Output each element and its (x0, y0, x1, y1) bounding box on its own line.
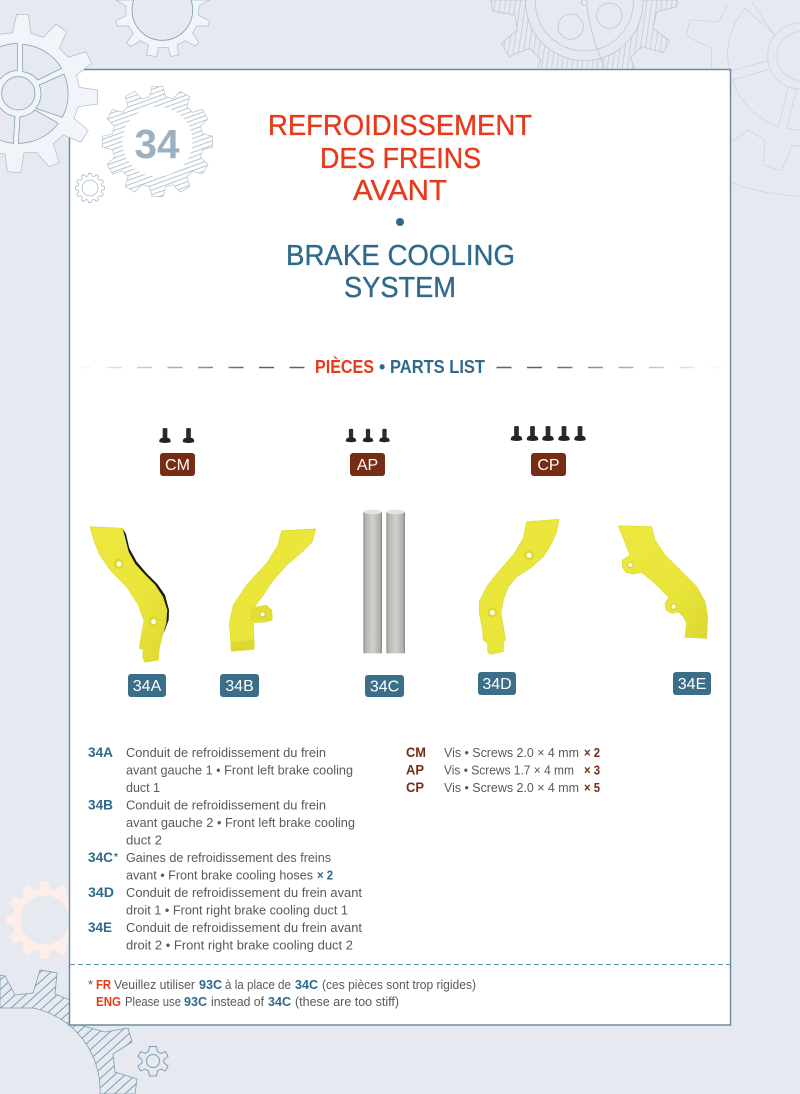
parts list: keys (88, 745, 118, 935)
label: 34B: 34B (225, 678, 254, 695)
label: 34A: 34A (133, 678, 162, 695)
gear: bottom left hatched (0, 970, 137, 1094)
footnote divider (70, 964, 730, 966)
parts list: descriptions: Conduit de refroidissement du frein avant (126, 920, 362, 935)
part: 34A (90, 527, 169, 662)
gear: top right outline (686, 2, 800, 196)
parts list: descriptions: × 2 (317, 868, 333, 882)
label: 34A (128, 674, 166, 697)
title: French (268, 110, 532, 207)
label: 34C: 34C (370, 678, 399, 696)
footnote: FR (96, 977, 112, 992)
title: English: SYSTEM (344, 272, 456, 304)
screws: CM (159, 428, 194, 443)
screws: CP (511, 426, 586, 441)
parts list: descriptions: Conduit de refroidissement du frein avant (126, 885, 362, 900)
title: French: REFROIDISSEMENT (268, 110, 532, 142)
part: 34D (479, 519, 559, 654)
gear: number 34 badge: 34 (134, 121, 180, 167)
label: CM: CM (165, 457, 190, 474)
parts list: descriptions: avant • Front brake cooling hoses (126, 868, 313, 882)
footnote: Veuillez utiliser (114, 977, 196, 992)
label: 34E: 34E (678, 676, 706, 693)
label: AP (350, 453, 385, 476)
label: 34D (478, 672, 516, 695)
parts list: keys: 34C (88, 850, 113, 865)
title: English (286, 240, 515, 304)
footnote: 34C (295, 977, 319, 992)
screws list (406, 745, 600, 795)
parts list: descriptions: droit 2 • Front right brake cooling duct 2 (126, 938, 353, 952)
screws list: × 2 (584, 745, 600, 760)
title: English: BRAKE COOLING (286, 240, 515, 272)
label: 34C (365, 675, 404, 697)
parts list: keys: 34E (88, 920, 112, 935)
parts list: descriptions (126, 745, 362, 952)
gear: top center (116, 0, 209, 57)
footnote: Please use (125, 994, 181, 1009)
footnote: (these are too stiff) (295, 994, 399, 1009)
heading: parts list: PIÈCES (315, 356, 374, 377)
footnote: (ces pièces sont trop rigides) (322, 977, 476, 992)
footnote: 34C (268, 994, 292, 1009)
part: 34C hoses (363, 510, 405, 653)
footnote: * (88, 977, 93, 992)
parts list: descriptions: droit 1 • Front right brake cooling duct 1 (126, 902, 348, 918)
footnote (88, 977, 476, 1009)
title: French: AVANT (353, 175, 447, 207)
label: CP (531, 453, 566, 476)
screws: AP (346, 429, 390, 442)
screws list: CP (406, 780, 424, 795)
parts list: keys: 34A (88, 745, 113, 760)
gear: pink (7, 882, 84, 958)
part: 34B (229, 529, 316, 651)
footnote: à la place de (225, 977, 291, 992)
screws list: Vis • Screws 2.0 × 4 mm (444, 780, 579, 795)
parts list: descriptions: Gaines de refroidissement des freins (126, 850, 331, 865)
parts list: descriptions: duct 2 (126, 832, 162, 848)
gear: small bottom (138, 1046, 168, 1076)
label: CP: CP (537, 457, 560, 474)
screws list: AP (406, 762, 424, 778)
heading: parts list: • (379, 357, 385, 377)
screws list: × 5 (584, 780, 600, 795)
parts list: descriptions: Conduit de refroidissement du frein (126, 798, 326, 812)
footnote: instead of (211, 994, 264, 1009)
heading: parts list: PARTS LIST (390, 357, 485, 377)
gear: number 34 badge (102, 87, 212, 197)
screws list: CM (406, 745, 426, 760)
section divider dashes (76, 366, 725, 368)
part: 34E (618, 526, 708, 638)
label: AP: AP (357, 457, 378, 474)
screws list: Vis • Screws 2.0 × 4 mm (444, 745, 579, 760)
parts list: keys: * (114, 852, 118, 863)
parts list: descriptions: Conduit de refroidissement du frein (126, 745, 326, 760)
label: 34B (220, 674, 259, 697)
heading: parts list (315, 356, 485, 377)
screws list: × 3 (584, 762, 600, 778)
parts list: descriptions: avant gauche 1 • Front left brake cooling (126, 762, 353, 778)
parts list: descriptions: avant gauche 2 • Front left brake cooling (126, 815, 355, 830)
label: CM (160, 453, 195, 476)
footnote: ENG (96, 994, 121, 1009)
footnote: 93C (184, 994, 208, 1009)
parts list: keys: 34B (88, 798, 113, 812)
panel: white page (70, 70, 730, 1025)
parts list: descriptions: duct 1 (126, 780, 160, 795)
parts list: keys: 34D (88, 885, 114, 900)
title: French: DES FREINS (320, 143, 481, 175)
gear: top right hatched (491, 0, 677, 70)
label: 34E (673, 672, 711, 695)
screws list: Vis • Screws 1.7 × 4 mm (444, 762, 574, 778)
label: 34D: 34D (482, 676, 512, 693)
gear: top left with spokes (0, 14, 98, 173)
gear: small outline (75, 173, 105, 203)
title separator dot (396, 218, 404, 226)
footnote: 93C (199, 977, 223, 992)
